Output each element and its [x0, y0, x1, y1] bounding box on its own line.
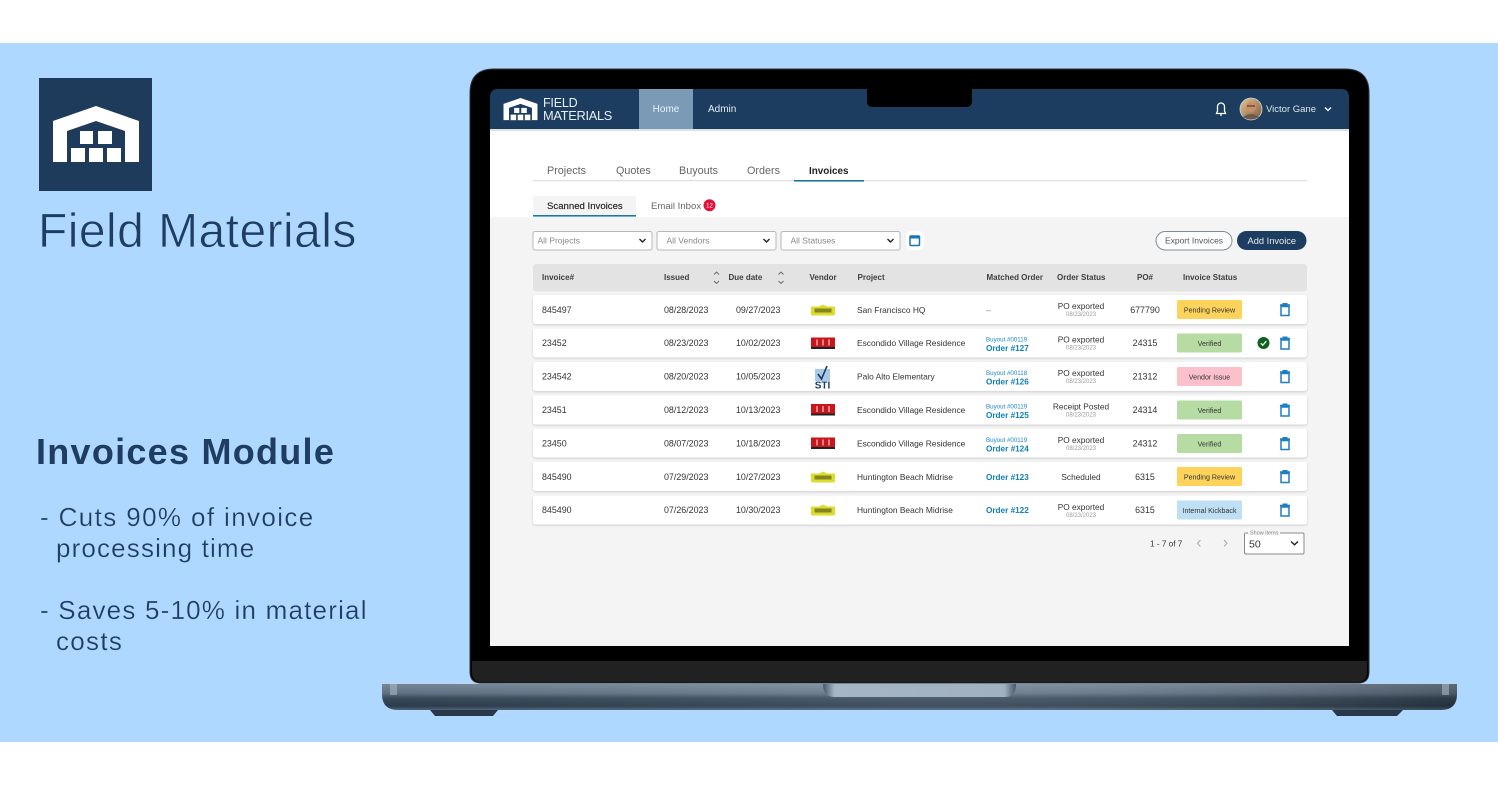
app wordmark	[543, 96, 612, 123]
table header: Matched Order	[986, 273, 1043, 282]
heading: Invoices Module: Invoices Module	[36, 431, 335, 472]
nav link: Admin: Admin	[708, 104, 736, 115]
table row 23450: 08/23/2023	[1066, 446, 1097, 452]
table row 234542	[533, 362, 1307, 392]
sub tabs: Email Inbox	[651, 201, 701, 212]
camera notch	[867, 89, 972, 107]
bullet: invoice processing time: - Cuts 90% of invoice	[40, 502, 315, 532]
table row 234542: Palo Alto Elementary	[857, 372, 936, 382]
table row 234542: 21312	[1133, 372, 1157, 382]
table row 23451: Escondido Village Residence	[857, 405, 966, 415]
table header: Project	[858, 273, 885, 282]
table row 845497: 845497	[542, 305, 572, 315]
main tabs: Orders	[747, 165, 781, 177]
icon: user chevron	[1325, 108, 1331, 110]
pagination	[1150, 530, 1304, 554]
sub tabs	[533, 196, 716, 217]
table row 23452: Escondido Village Residence	[857, 338, 966, 348]
filters: All Projects	[538, 236, 580, 246]
table header: Order Status	[1057, 273, 1106, 282]
icon: bell	[1216, 103, 1226, 115]
table row 23452: 08/23/2023	[1066, 346, 1097, 352]
table row 845490 Order 122	[533, 496, 1307, 524]
pagination: 1 - 7 of 7	[1150, 539, 1183, 548]
table row 23450	[533, 428, 1307, 458]
table row 23452: 10/02/2023	[736, 338, 780, 348]
table header: Invoice#	[542, 273, 575, 282]
icon: Field Materials warehouse logo	[39, 78, 152, 191]
table row 23452	[533, 328, 1307, 358]
table row 23450: 08/07/2023	[664, 438, 708, 448]
main tabs: Buyouts	[679, 165, 719, 177]
table row 23451: 24314	[1133, 405, 1157, 415]
table row 23452: 08/23/2023	[664, 338, 708, 348]
table row 23451: 08/12/2023	[664, 405, 708, 415]
table header: Invoice Status	[1183, 273, 1238, 282]
main tabs	[533, 165, 1307, 182]
vendor logo: STI	[815, 366, 830, 392]
main tabs: Projects	[547, 165, 587, 177]
table row 845497: Pending Review	[1184, 306, 1236, 314]
icon: trash	[1280, 504, 1290, 516]
filters: All Vendors	[666, 236, 710, 246]
table row 845490 Order 123: 10/27/2023	[736, 472, 780, 482]
sub tabs: Scanned Invoices	[547, 201, 623, 212]
table row 23451	[533, 396, 1307, 424]
vendor logo: STI: STI	[815, 380, 830, 392]
icon: trash	[1280, 404, 1290, 416]
table row 23451: Verified	[1198, 407, 1221, 415]
table row 234542: Vendor Issue	[1189, 374, 1230, 382]
table row 23452: PO exported	[1058, 334, 1105, 344]
table row 845490 Order 122: 845490	[542, 505, 572, 515]
active nav tab: Home: Home	[653, 104, 680, 115]
table row 23452: Order #127	[986, 344, 1029, 353]
title: Field Materials: Field Materials	[38, 205, 357, 258]
icon: trash	[1280, 471, 1290, 482]
table row 23450: Escondido Village Residence	[857, 438, 966, 448]
table row 23450: Buyout #00119	[986, 437, 1028, 444]
icon: verified check	[1258, 337, 1270, 349]
table row 234542: 08/20/2023	[664, 372, 708, 382]
table row 23450: 10/18/2023	[736, 438, 780, 448]
show items select: 50	[1249, 538, 1261, 550]
table row 23451: 08/23/2023	[1066, 412, 1097, 418]
vendor logo: red	[811, 338, 835, 349]
main tabs: Invoices	[809, 166, 849, 177]
table row 23452: 24315	[1133, 338, 1157, 348]
table row 845497: San Francisco HQ	[857, 305, 926, 315]
app wordmark: FIELD	[543, 96, 578, 110]
user name: Victor Gane	[1266, 104, 1316, 115]
table row 23450: PO exported	[1058, 435, 1105, 445]
show items select	[1244, 530, 1304, 554]
table row 845490 Order 123	[533, 462, 1307, 491]
table row 845497: 08/28/2023	[664, 305, 708, 315]
table row 23452: Verified	[1198, 340, 1221, 348]
icon: calendar	[906, 231, 924, 250]
table row 845490 Order 123: Scheduled	[1061, 472, 1101, 482]
table row 845490 Order 122: 6315	[1135, 505, 1155, 515]
table row 23452: Buyout #00119	[986, 336, 1028, 344]
table row 845497: 09/27/2023	[736, 305, 780, 315]
show items select: Show items	[1250, 530, 1279, 536]
table row 845490 Order 122: 10/30/2023	[736, 505, 780, 515]
table row 845497: 677790	[1130, 305, 1160, 315]
table row 23450: Verified	[1198, 440, 1221, 448]
table row 845490 Order 122: Order #122	[986, 506, 1029, 515]
table row 23451: Receipt Posted	[1053, 402, 1110, 412]
laptop base	[382, 683, 1457, 716]
table row 845490 Order 122: PO exported	[1058, 502, 1105, 512]
icon: trash	[1280, 438, 1290, 450]
vendor logo: yellow	[811, 304, 835, 316]
table row 845490 Order 122: 07/26/2023	[664, 505, 708, 515]
icon: trash	[1280, 371, 1290, 382]
user avatar	[1240, 98, 1262, 120]
laptop mockup	[382, 69, 1457, 716]
table row 234542: Order #126	[986, 378, 1029, 386]
table row 234542: PO exported	[1058, 368, 1105, 378]
filters: All Statuses	[790, 236, 835, 246]
table row 23451: Order #125	[986, 411, 1029, 420]
sub tabs: 12	[706, 203, 713, 209]
icon: app logo	[504, 98, 537, 120]
table row 845497: –	[986, 305, 991, 315]
vendor logo: red	[811, 404, 835, 416]
table row 23451: 23451	[542, 405, 567, 415]
table row 23451: 10/13/2023	[736, 405, 780, 415]
table row 845490 Order 123: Pending Review	[1184, 474, 1236, 482]
table row 23450: 24312	[1133, 438, 1157, 448]
bullet: material costs: costs	[56, 626, 123, 656]
table row 845497	[533, 295, 1307, 324]
vendor logo: red	[811, 438, 835, 449]
table row 234542: 234542	[542, 372, 572, 382]
bullet: invoice processing time: processing time	[56, 533, 255, 563]
table row 845490 Order 123: 07/29/2023	[664, 472, 708, 482]
table header: Issued	[664, 273, 689, 282]
table row 845490 Order 123: Huntington Beach Midrise	[857, 472, 953, 482]
button: Export Invoices: Export Invoices	[1165, 236, 1223, 246]
table header: PO#	[1137, 273, 1154, 282]
table row 23450: 23450	[542, 438, 567, 448]
table row 845497: 08/23/2023	[1066, 312, 1097, 318]
bullet: material costs	[40, 595, 368, 656]
table header	[533, 264, 1307, 292]
table row 845490 Order 122: Internal Kickback	[1182, 507, 1237, 515]
table row 845490 Order 123: 845490	[542, 472, 572, 482]
table row 234542: 10/05/2023	[736, 372, 780, 382]
vendor logo: yellow	[811, 472, 835, 482]
button: Add Invoice: Add Invoice	[1248, 236, 1296, 246]
table row 845490 Order 123: 6315	[1135, 472, 1155, 482]
table row 845490 Order 122: Huntington Beach Midrise	[857, 505, 953, 515]
bullet: invoice processing time	[40, 502, 315, 563]
table row 23452: 23452	[542, 338, 567, 348]
table row 23450: Order #124	[986, 444, 1029, 454]
filters	[533, 232, 900, 250]
bullet: material costs: - Saves 5-10% in material	[40, 595, 368, 625]
button: Export Invoices	[1156, 232, 1232, 250]
icon: trash	[1280, 304, 1290, 316]
table row 23451: Buyout #00119	[986, 404, 1028, 410]
icon: trash	[1280, 337, 1290, 349]
app wordmark: MATERIALS	[543, 108, 612, 123]
laptop bezel	[470, 69, 1369, 683]
table header: Vendor	[810, 273, 837, 282]
table row 845490 Order 123: Order #123	[986, 473, 1029, 482]
table row 234542: 08/23/2023	[1066, 379, 1097, 385]
active nav tab: Home	[639, 89, 693, 129]
button: Add Invoice	[1237, 231, 1306, 250]
table row 845490 Order 122: 08/23/2023	[1066, 513, 1097, 519]
app screen	[490, 89, 1349, 646]
vendor logo: yellow	[811, 504, 835, 516]
main tabs: Quotes	[616, 165, 651, 177]
table header: Due date	[728, 273, 763, 282]
table row 845497: PO exported	[1058, 301, 1105, 311]
table row 234542: Buyout #00118	[986, 370, 1028, 377]
navigation bar	[490, 89, 1349, 131]
